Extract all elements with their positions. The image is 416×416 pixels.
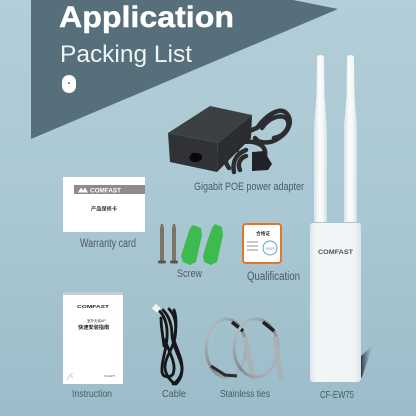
booklet title: 快速安装指南 <box>78 323 109 331</box>
illustration: screws and anchors <box>158 224 223 265</box>
adapter plug <box>252 151 272 171</box>
right antenna <box>344 55 357 222</box>
icon: white pill marker <box>62 75 76 93</box>
cable connector <box>152 304 161 313</box>
caption: CF-EW75: CF-EW75 <box>320 389 354 401</box>
warranty card logo mark <box>78 188 88 192</box>
caption: qualification: Qualification <box>247 271 300 283</box>
tie 2 <box>234 319 281 380</box>
device shadow <box>361 345 373 378</box>
illustration: POE power adapter <box>168 106 290 172</box>
caption: adapter: Gigabit POE power adapter <box>194 181 304 193</box>
subtitle: Packing List: Packing List <box>60 41 192 68</box>
caption: cable: Cable <box>162 388 186 400</box>
wall anchor 1 <box>181 225 202 265</box>
warranty card <box>63 177 145 232</box>
illustration: network cable <box>152 304 182 384</box>
product: CF-EW75 access point <box>310 55 373 382</box>
wall anchor 2 <box>203 224 223 265</box>
adapter front face <box>168 133 218 172</box>
adapter side face <box>217 115 252 172</box>
caption: instruction: Instruction <box>72 388 112 400</box>
left antenna <box>314 55 327 222</box>
adapter power cord <box>226 111 290 172</box>
device logo: COMFAST <box>318 249 354 256</box>
adapter top face <box>168 106 252 143</box>
title: Application: Application <box>59 1 234 34</box>
certificate text lines <box>247 242 258 250</box>
warranty card title: 产品保修卡 <box>91 204 117 212</box>
caption: stainless ties: Stainless ties <box>220 388 270 400</box>
certificate stamp: PASS <box>266 247 275 251</box>
device body <box>310 223 361 382</box>
warranty card brand: COMFAST <box>90 188 121 194</box>
qualification certificate <box>243 224 281 263</box>
booklet footnote: CF-EW75 <box>104 375 116 378</box>
caption: screw: Screw <box>177 268 202 280</box>
screw 2 <box>170 224 178 264</box>
warranty card header bar <box>74 185 145 194</box>
booklet subtitle: 室外无线AP <box>87 318 106 323</box>
caption: warranty card: Warranty card <box>80 238 136 250</box>
illustration: stainless ties <box>206 319 281 380</box>
title banner <box>31 0 338 139</box>
certificate title: 合格证 <box>256 230 270 237</box>
booklet brand: COMFAST <box>77 304 109 309</box>
instruction booklet <box>63 292 123 384</box>
tie 1 <box>206 319 253 380</box>
adapter socket <box>189 153 202 162</box>
booklet runner icon <box>67 373 73 380</box>
screw 1 <box>158 224 166 264</box>
